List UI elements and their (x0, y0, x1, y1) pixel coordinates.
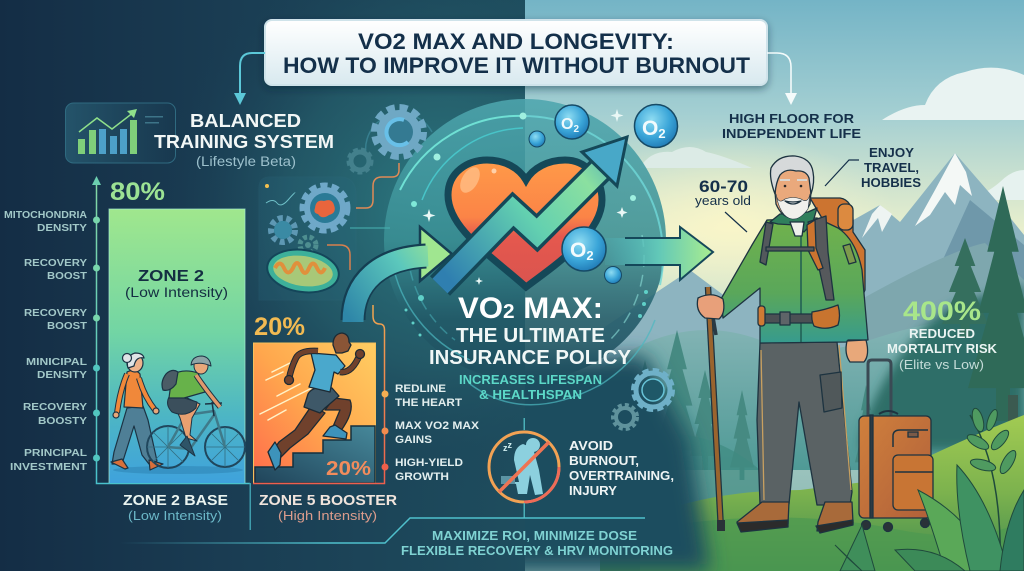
400 percent stat: (Elite vs Low) (899, 357, 984, 372)
heading: high floor: INDEPENDENT LIFE (722, 126, 861, 141)
callout: enjoy travel: TRAVEL, (864, 161, 919, 175)
central teal disc with rings (384, 99, 666, 405)
sparkles (422, 109, 628, 285)
callout: age: 60-70 (699, 178, 748, 196)
illustration: senior hiker (697, 156, 868, 533)
callout: enjoy travel (825, 146, 921, 190)
heading: balanced training system (154, 110, 334, 169)
heading: VO2 max insurance policy: VO2 MAX: (458, 292, 603, 325)
left axis labels: BOOSTY (38, 415, 87, 427)
heading: VO2 max insurance policy (429, 292, 631, 402)
arrow: zigzag rising through heart (440, 137, 627, 286)
O2 bubbles: O (570, 239, 586, 262)
right axis labels: REDLINE (395, 383, 446, 395)
bar: zone 5 (254, 333, 376, 483)
80 percent label: 80% (110, 178, 165, 206)
heading: balanced training system: BALANCED (190, 110, 301, 131)
heading: high floor: HIGH FLOOR FOR (729, 111, 855, 126)
icon: suitcase (859, 360, 933, 532)
left axis labels: DENSITY (37, 222, 87, 234)
callout: enjoy travel: ENJOY (869, 146, 915, 160)
bottom bracket line (120, 518, 645, 543)
avoid burnout text: BURNOUT, (569, 453, 639, 468)
avoid burnout text: OVERTRAINING, (569, 468, 674, 483)
O2 bubbles: 2 (658, 126, 666, 141)
icon: no burnout sign: z (503, 443, 508, 453)
400 percent stat: REDUCED (909, 327, 975, 341)
right axis labels: GAINS (395, 434, 432, 446)
400 percent stat: MORTALITY RISK (887, 342, 997, 356)
jacket (721, 218, 868, 343)
heading: balanced training system: (Lifestyle Beta) (196, 154, 296, 169)
arrow: heart to hiker (605, 227, 713, 280)
icon: gears with ring (349, 108, 432, 172)
ground hills (600, 415, 1024, 571)
zone labels under bars: (High Intensity) (278, 509, 377, 523)
left axis labels: MINICIPAL (26, 356, 88, 368)
left axis labels: PRINCIPAL (24, 447, 88, 459)
arrow: title to training system (234, 53, 265, 105)
avoid burnout text (569, 438, 674, 498)
icon: no burnout sign: z (508, 440, 512, 450)
icon: walking woman (111, 353, 163, 470)
bar: zone 2 (109, 209, 245, 483)
background: dark navy left panel with teal glow (0, 0, 710, 571)
400 percent stat (887, 296, 997, 372)
zone labels under bars: ZONE 2 BASE (123, 493, 228, 509)
20 percent label: 20% (254, 313, 305, 341)
heading: VO2 max insurance policy: & HEALTHSPAN (479, 387, 582, 402)
icon: no burnout sign (489, 418, 559, 518)
boots (737, 502, 853, 533)
right axis labels: MAX VO2 MAX (395, 420, 480, 432)
right axis with nodes (253, 305, 388, 484)
left axis labels: RECOVERY (23, 401, 87, 413)
icon: trekking pole (708, 287, 725, 531)
O2 bubbles: 2 (586, 248, 594, 263)
icon: growth chart panel (66, 103, 176, 163)
callout: age (695, 178, 751, 232)
right hand (846, 340, 868, 362)
O2 bubbles: O (561, 116, 573, 133)
avoid burnout text: INJURY (569, 483, 617, 498)
zone labels under bars (123, 483, 398, 530)
heading: high floor (722, 111, 861, 141)
heading: VO2 max insurance policy: INSURANCE POLICY (429, 346, 631, 369)
arrow: title to high floor (767, 53, 797, 105)
icon: heart (448, 160, 602, 287)
left axis labels (4, 209, 88, 473)
bar: zone 2: (Low Intensity) (125, 285, 228, 300)
foreground plants (835, 407, 1024, 571)
left axis labels: DENSITY (37, 369, 87, 381)
far mountains (600, 153, 1024, 420)
bar: zone 2: ZONE 2 (138, 268, 204, 285)
icon: small gears right (613, 371, 672, 429)
left axis labels: BOOST (47, 320, 88, 332)
zone labels under bars: (Low Intensity) (128, 509, 222, 523)
O2 bubbles: O (642, 117, 658, 140)
left axis labels: RECOVERY (24, 307, 87, 319)
O2 bubbles (529, 104, 678, 284)
O2 bubbles: 2 (573, 124, 579, 135)
right axis labels: GROWTH (395, 471, 449, 483)
callout: age: years old (695, 194, 751, 208)
zone labels under bars: ZONE 5 BOOSTER (259, 493, 398, 509)
bottom takeaway text: MAXIMIZE ROI, MINIMIZE DOSE (432, 528, 637, 543)
belt (760, 314, 816, 323)
left hand (697, 295, 724, 319)
heading: VO2 max insurance policy: THE ULTIMATE (456, 324, 605, 347)
bottom takeaway text (401, 528, 673, 558)
left axis labels: MITOCHONDRIA (4, 209, 87, 221)
sleeve patch (843, 244, 856, 264)
cloud right (882, 68, 1024, 120)
right axis labels: THE HEART (395, 397, 462, 409)
forest (628, 330, 877, 480)
panel: cell and mitochondria (259, 163, 399, 300)
backpack (810, 198, 865, 330)
trousers (757, 342, 852, 505)
left axis labels: INVESTMENT (10, 461, 88, 473)
right axis labels: HIGH-YIELD (395, 457, 463, 469)
left axis labels: BOOST (47, 270, 88, 282)
icon: cyclist (147, 356, 245, 468)
head (770, 156, 814, 219)
bottom takeaway text: FLEXIBLE RECOVERY & HRV MONITORING (401, 543, 673, 558)
callout: enjoy travel: HOBBIES (861, 176, 921, 190)
left axis labels: RECOVERY (24, 257, 87, 269)
400 percent stat: 400% (903, 296, 981, 326)
icon: runner on stairs (268, 333, 364, 470)
heading: balanced training system: TRAINING SYSTEM (154, 131, 334, 152)
right axis labels (395, 383, 480, 483)
left axis with nodes (92, 176, 250, 484)
title banner: VO2 MAX AND LONGEVITY: (358, 29, 674, 54)
title banner (265, 20, 767, 85)
arrow: training to heart (353, 227, 452, 322)
straps (760, 222, 773, 265)
title banner: HOW TO IMPROVE IT WITHOUT BURNOUT (283, 53, 751, 78)
avoid burnout text: AVOID (569, 438, 613, 453)
heading: VO2 max insurance policy: INCREASES LIFESPAN (459, 372, 602, 387)
bar: zone 5: 20% (326, 458, 371, 480)
